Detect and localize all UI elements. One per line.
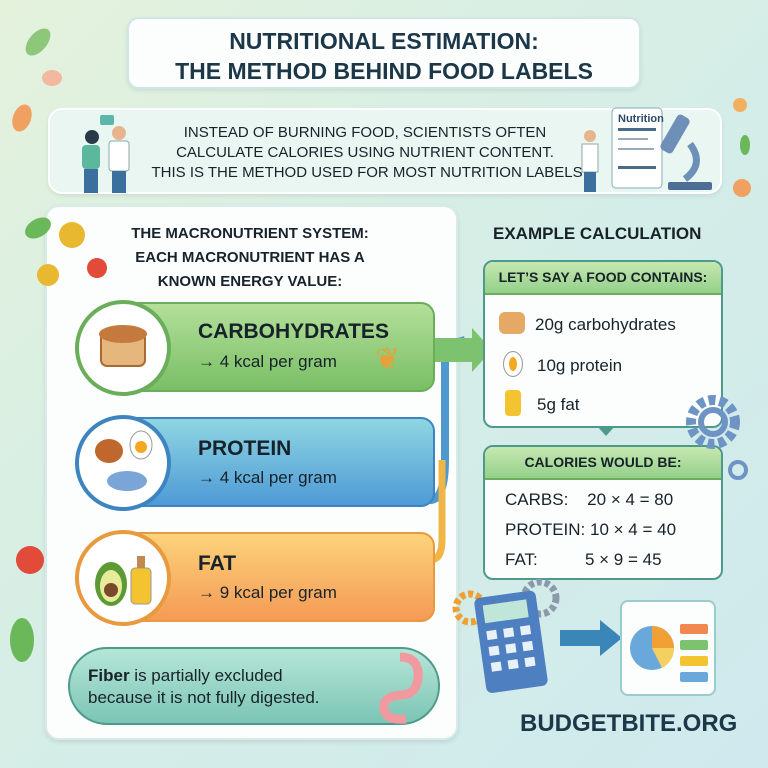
item: carbs: [499, 312, 676, 334]
panel: macronutrient system: [45, 205, 458, 740]
item: fat: [505, 390, 580, 416]
icon: intestine: [379, 652, 423, 724]
icon: wheat: ❦: [375, 343, 400, 376]
panel: calories would be: CARBS: 20 × 4 = 80 PROTEIN: 10 × 4 = 40 FAT: 5 × 9 = 45: [505, 490, 676, 569]
card: fat: [75, 530, 435, 626]
heading: macronutrient system: KNOWN ENERGY VALUE:: [158, 273, 342, 290]
card: protein: PROTEIN: [198, 437, 291, 460]
heading: example calculation: EXAMPLE CALCULATION: [493, 224, 701, 243]
intro text: [151, 124, 587, 181]
intro text: CALCULATE CALORIES USING NUTRIENT CONTENT.: [176, 144, 554, 161]
card: carbohydrates: [75, 300, 435, 396]
card: carbohydrates: CARBOHYDRATES: [198, 320, 389, 343]
intro text: THIS IS THE METHOD USED FOR MOST NUTRITION LABELS.: [151, 164, 587, 181]
brand: BUDGETBITE.ORG: [520, 710, 737, 737]
icon: calculator: [452, 578, 560, 693]
panel: food contains: LET’S SAY A FOOD CONTAINS:: [499, 269, 707, 285]
icon: nutrition label and microscope: [582, 108, 712, 192]
icon: scientists talking: [82, 115, 130, 193]
icon: pie chart report: [620, 600, 716, 696]
item: protein: 10g protein: [537, 356, 622, 375]
icon: avocado and oil: [75, 530, 171, 626]
connectors arrows: [430, 328, 483, 563]
icon: gears: [686, 395, 748, 480]
icon: chicken egg fish: [75, 415, 171, 511]
card: carbohydrates: → 4 kcal per gram: [198, 352, 337, 371]
heading: macronutrient system: THE MACRONUTRIENT SYSTEM:: [131, 225, 369, 242]
card: fat: FAT: [198, 552, 236, 575]
panel: calories would be: CALORIES WOULD BE:: [524, 454, 682, 470]
arrow: calculator to chart: [560, 620, 620, 656]
intro panel: [48, 108, 722, 194]
heading: macronutrient system: EACH MACRONUTRIENT HAS A: [135, 249, 365, 266]
item: carbs: 20g carbohydrates: [535, 315, 676, 334]
icon: nutrition label and microscope: Nutrition: [618, 113, 664, 125]
title: [127, 17, 641, 89]
card: protein: [75, 415, 435, 511]
pointer arrow: [597, 426, 615, 436]
item: fat: 5g fat: [537, 395, 580, 414]
icon: bread: [75, 300, 171, 396]
card: protein: → 4 kcal per gram: [198, 468, 337, 487]
panel: food contains: [483, 260, 723, 428]
panel: calories would be: [483, 445, 723, 580]
card: fat: → 9 kcal per gram: [198, 583, 337, 602]
callout: fiber: because it is not fully digested.: [88, 688, 320, 707]
intro text: INSTEAD OF BURNING FOOD, SCIENTISTS OFTEN: [184, 124, 546, 141]
title: THE METHOD BEHIND FOOD LABELS: [175, 58, 593, 84]
callout: fiber: [68, 647, 440, 725]
heading: macronutrient system: [131, 225, 369, 290]
item: protein: [503, 351, 622, 377]
title: NUTRITIONAL ESTIMATION:: [229, 28, 539, 54]
callout: fiber: Fiber is partially excluded: [88, 666, 283, 685]
